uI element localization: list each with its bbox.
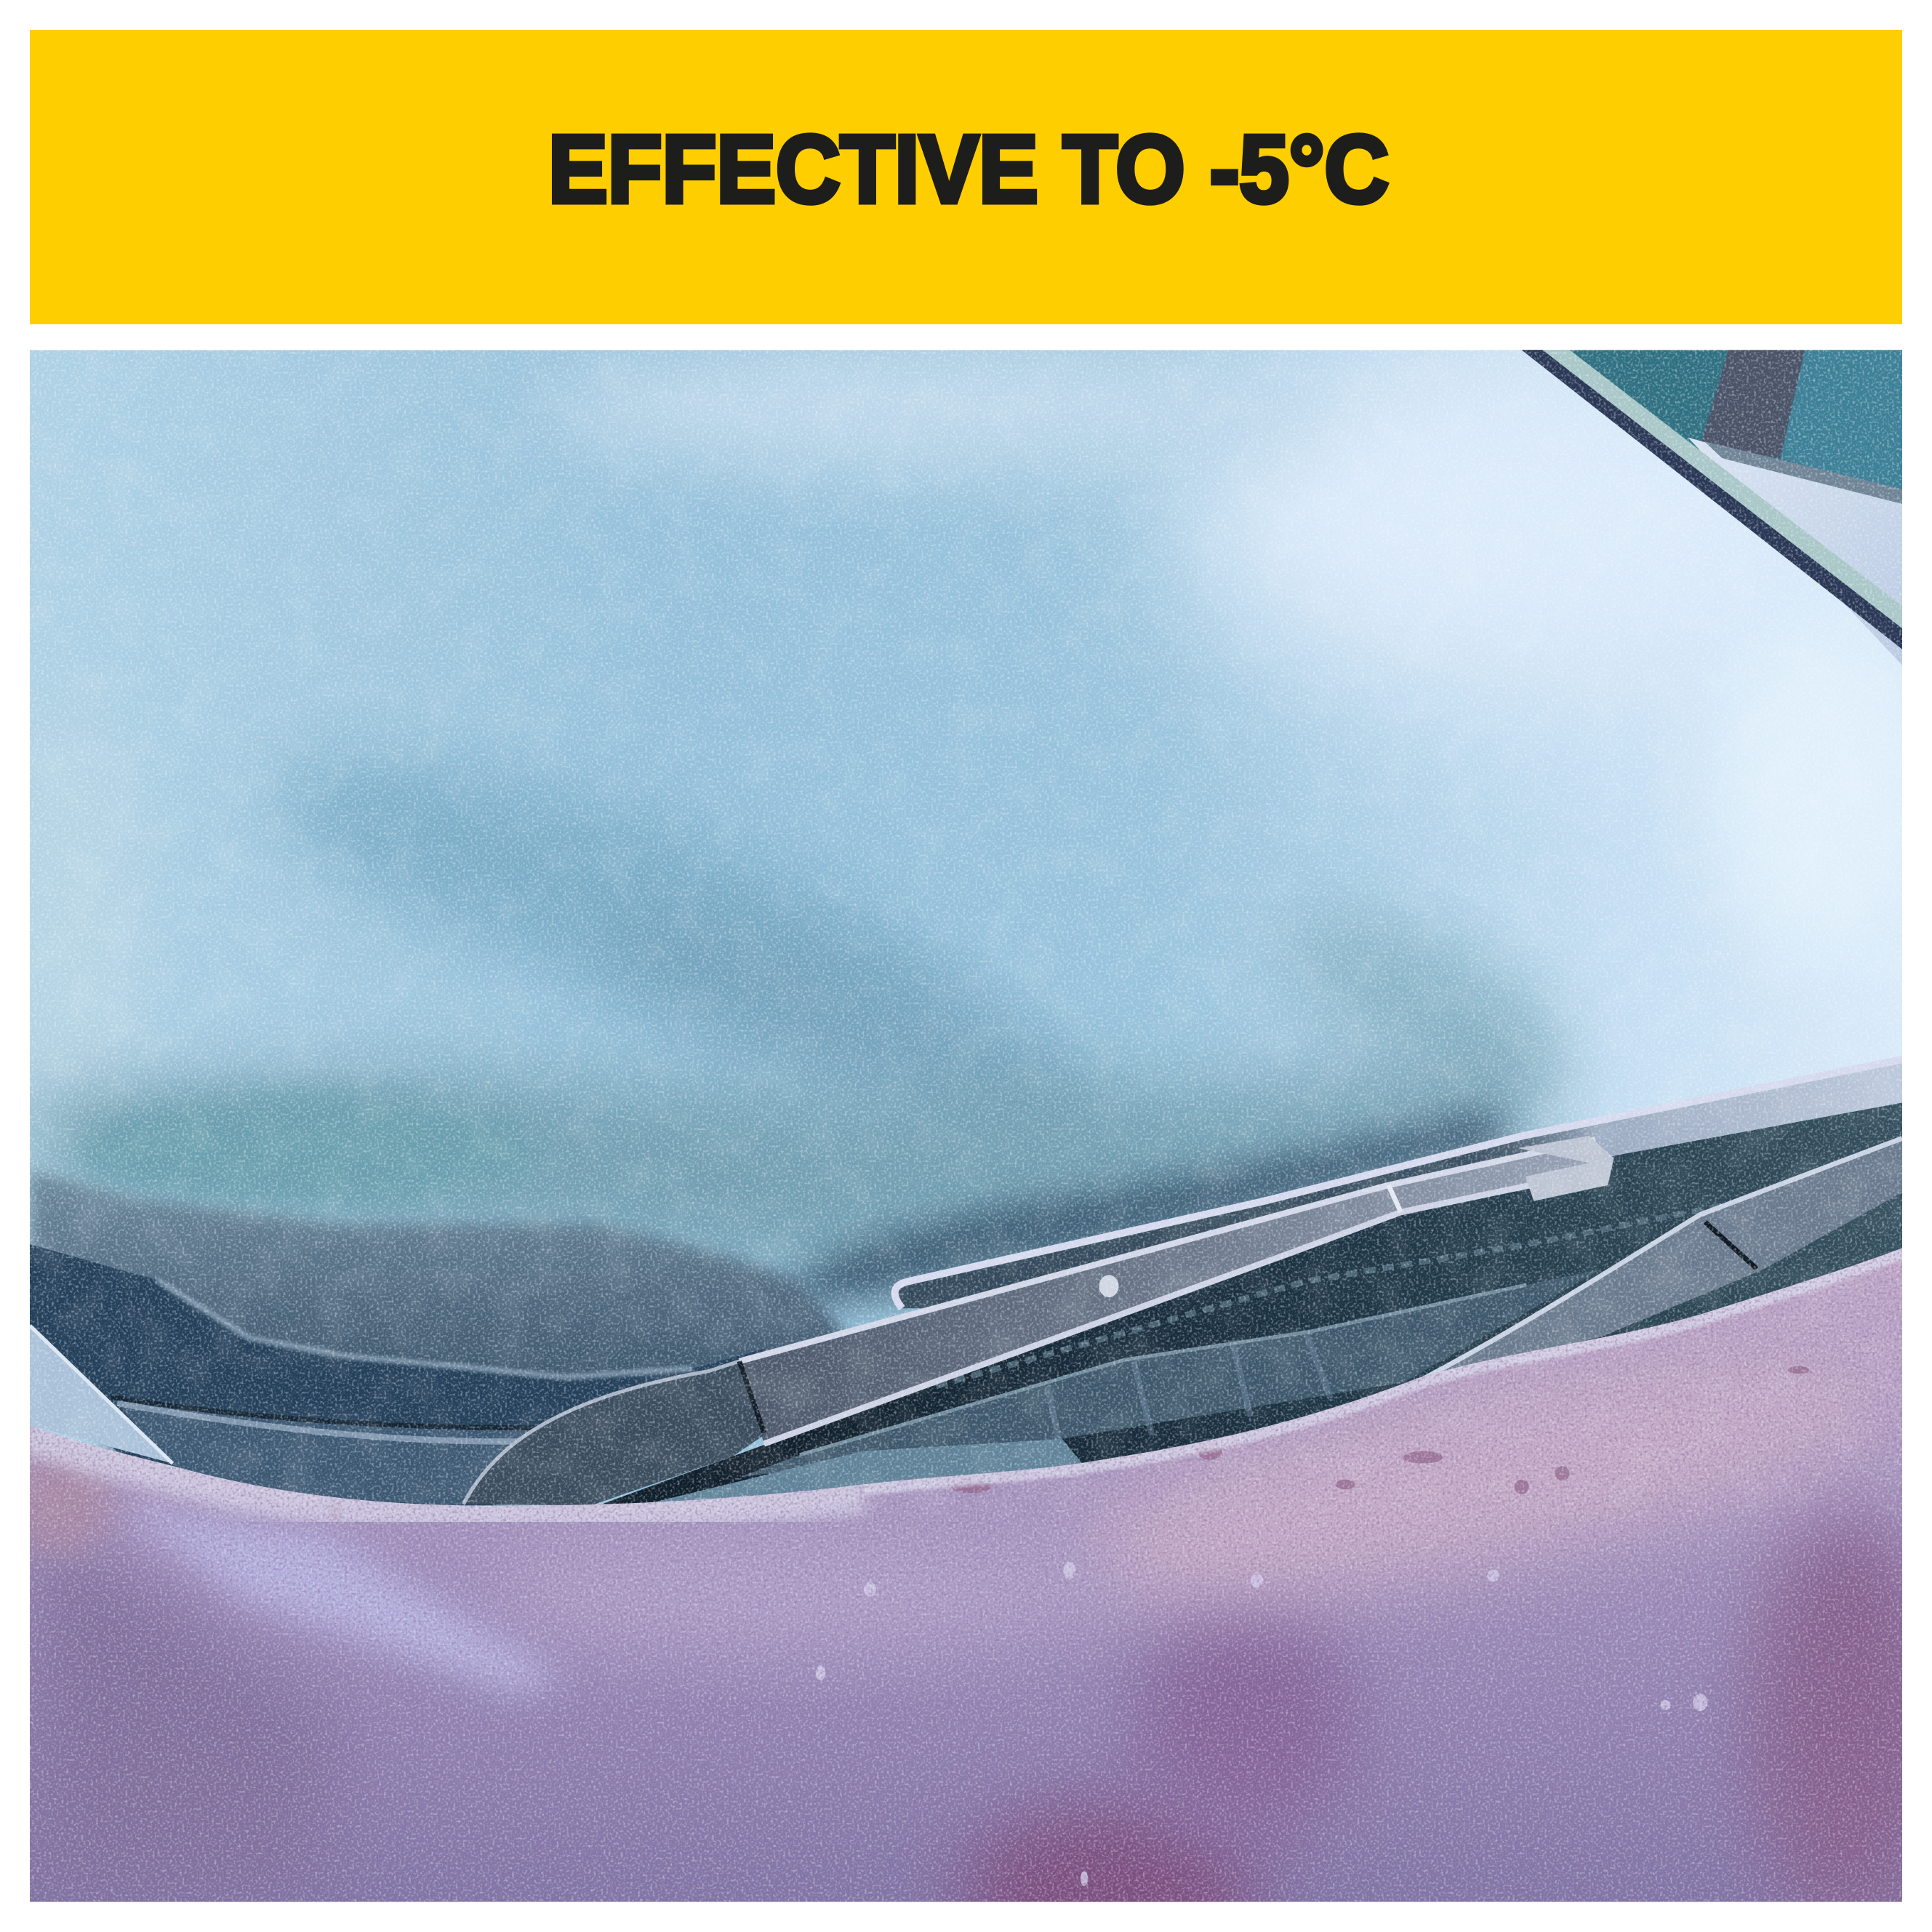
darkening above wiper strip [789, 1109, 1515, 1306]
right wiper arm [1417, 1138, 1902, 1382]
dark scuttle behind wipers [592, 1102, 1902, 1508]
bonnet [12, 1232, 1932, 1932]
darkest band under frost contour [30, 1244, 764, 1505]
upper wiper trim strip [895, 1059, 1902, 1308]
frost band down left of bonnet [124, 1509, 567, 1693]
frosted lip above bonnet [641, 1439, 1084, 1505]
windscreen frost surface [19, 333, 1932, 1533]
windscreen rubber trim [1522, 350, 1902, 649]
teal lower band of windscreen [30, 1047, 1552, 1294]
frost streaks in scuttle [937, 1170, 1902, 1386]
frost droplets [328, 1317, 1810, 1520]
slit in arm [739, 1361, 764, 1432]
frost fringe along bonnet edge [30, 1248, 1902, 1506]
frosted left triangle [30, 1326, 173, 1464]
heading: effective to -5°C: EFFECTIVE TO -5°C [548, 116, 1389, 223]
wiper head [1518, 1136, 1614, 1201]
dark lower windscreen area [30, 1170, 862, 1505]
frost grain texture [30, 350, 1902, 1902]
frost contour on dark glass [156, 1280, 692, 1377]
rivet [1099, 1275, 1119, 1297]
panel: yellow heading band [30, 30, 1902, 324]
panel: photo of frosted windscreen, wipers and bonnet [30, 350, 1902, 1902]
cowl panel bottom left [30, 1326, 546, 1505]
side window and pillar behind windscreen [1528, 350, 1902, 665]
main wiper arm and blade [463, 1136, 1614, 1505]
second wiper blade [641, 1269, 1602, 1505]
